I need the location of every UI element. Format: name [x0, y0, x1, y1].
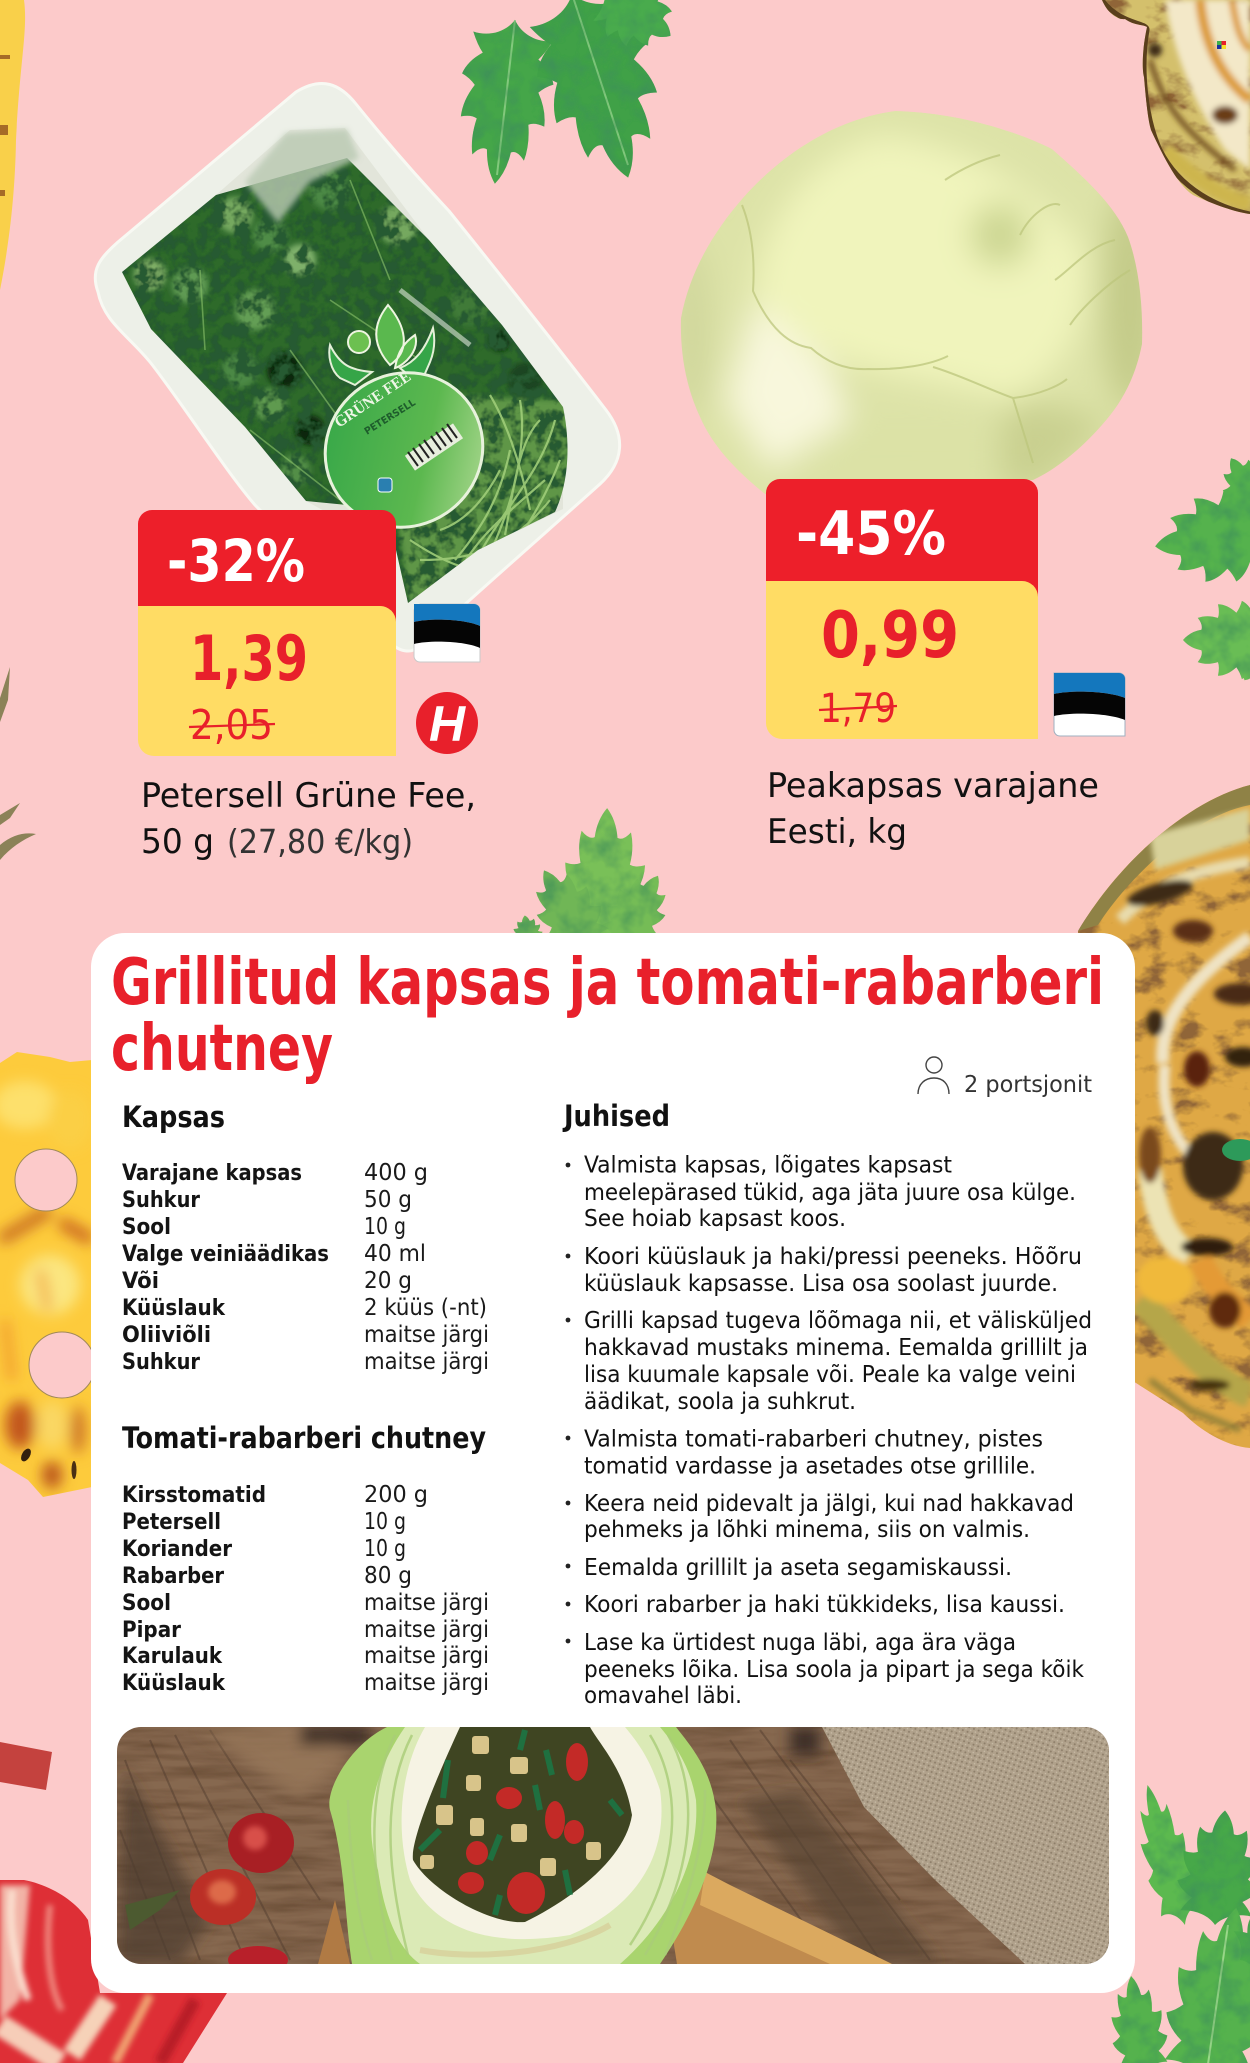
barcode bars: [408, 424, 457, 466]
ingredients: chutney: maitse järgi: [364, 1588, 489, 1616]
icon: person: [918, 1057, 949, 1094]
ingredients: chutney: Rabarber: [122, 1563, 224, 1589]
ingredients: Kapsas: maitse järgi: [364, 1320, 489, 1348]
ingredients: Kapsas: Suhkur: [122, 1187, 200, 1213]
ingredients: chutney: Pipar: [122, 1617, 181, 1643]
ingredients: Kapsas: 2 küüs (-nt): [364, 1293, 487, 1321]
colour registration mark: [1217, 41, 1226, 49]
ingredients: chutney: Küüslauk: [122, 1670, 226, 1696]
ingredients: Kapsas: 10 g: [364, 1212, 406, 1240]
flag: Estonia, parsley: [414, 604, 480, 662]
decoration: rhubarb lower left: [0, 1875, 240, 2063]
tag red: [138, 510, 396, 625]
burlap cloth: [822, 1727, 1109, 1964]
badge: H: [416, 692, 478, 754]
step texts: hakkavad mustaks minema. Eemalda grillilt ja: [584, 1333, 1088, 1361]
step texts: [584, 1150, 1092, 1709]
label logo: [378, 478, 392, 492]
ingredients: Kapsas: Suhkur: [122, 1349, 200, 1375]
product label: [295, 305, 513, 558]
decoration: pineapple sliver top left: [0, 0, 25, 290]
label crown: [329, 328, 434, 385]
ingredients: Kapsas: 400 g: [364, 1158, 428, 1186]
tray: [95, 83, 620, 651]
decoration: parsley leaf above the card: [510, 807, 683, 966]
decoration: parsley leaf bottom right: [1104, 1779, 1250, 2063]
step texts: lisa kuumale kapsale või. Peale ka valge veini: [584, 1360, 1076, 1388]
ingredients: chutney: 10 g: [364, 1534, 406, 1562]
bullets: [566, 1163, 570, 1643]
product name: cabbage: [767, 766, 1099, 852]
step texts: omavahel läbi.: [584, 1681, 742, 1709]
cabbage head: [676, 111, 1158, 495]
heading: Juhised: Juhised: [562, 1099, 670, 1133]
ingredients: chutney: maitse järgi: [364, 1615, 489, 1643]
parsley bunch: [110, 150, 580, 610]
product: cabbage: [676, 111, 1158, 495]
step texts: küüslauk kapsasse. Lisa osa soolast juurde.: [584, 1269, 1058, 1297]
product name: cabbage: Eesti, kg: [767, 812, 907, 852]
heading: Kapsas: Kapsas: [122, 1100, 225, 1134]
panel: recipe card: [91, 933, 1135, 1993]
ingredients: chutney: Kirsstomatid: [122, 1482, 266, 1508]
flag: Estonia, cabbage: [1054, 673, 1125, 736]
step texts: Koori rabarber ja haki tükkideks, lisa kaussi.: [584, 1590, 1065, 1618]
ingredients: Kapsas: Küüslauk: [122, 1295, 226, 1321]
price tag: cabbage: [766, 479, 1038, 739]
ingredients: Kapsas: Varajane kapsas: [122, 1160, 302, 1186]
step texts: tomatid vardasse ja asetades otse grillile.: [584, 1452, 1036, 1480]
ingredients: chutney: Sool: [122, 1590, 171, 1616]
discount: -45%: [796, 499, 946, 569]
ingredients: Kapsas: Valge veiniäädikas: [122, 1241, 329, 1267]
old price: 1,79: [820, 686, 896, 732]
heading: Tomati-rabarberi chutney: Tomati-rabarberi chutney: [122, 1421, 486, 1455]
product: parsley tray: [95, 83, 620, 651]
step texts: See hoiab kapsast koos.: [584, 1204, 846, 1232]
salsa: [413, 1727, 632, 1922]
ingredients: chutney: Koriander: [122, 1536, 232, 1562]
step texts: pehmeks ja lõhki minema, siis on valmis.: [584, 1515, 1030, 1543]
badge: H: H: [429, 696, 466, 752]
step texts: Lase ka ürtidest nuga läbi, aga ära väga: [584, 1628, 1016, 1656]
step texts: peeneks lõika. Lisa soola ja pipart ja sega kõik: [584, 1655, 1085, 1683]
decoration: grilled cabbage top right: [1100, 0, 1250, 220]
product name: parsley: Petersell Grüne Fee,: [141, 776, 476, 816]
wooden table: [117, 1727, 1109, 1964]
ingredients: chutney: 10 g: [364, 1507, 406, 1535]
ingredients: Kapsas: [122, 1158, 489, 1375]
cabbage wedge: [329, 1727, 716, 1964]
ingredients: chutney: 200 g: [364, 1480, 428, 1508]
product name: parsley: (27,80 €/kg): [227, 822, 413, 861]
product name: parsley: 50 g: [141, 822, 214, 862]
recipe title: chutney: [111, 1012, 333, 1086]
film glare: [400, 290, 470, 345]
step texts: Keera neid pidevalt ja jälgi, kui nad hakkavad: [584, 1489, 1074, 1517]
price: 0,99: [821, 599, 959, 673]
cherry tomatoes: [125, 1813, 294, 1974]
step texts: Koori küüslauk ja haki/pressi peeneks. Hõõru: [584, 1242, 1082, 1270]
tag red: [766, 479, 1038, 600]
wooden board: [318, 1872, 892, 1964]
recipe title: Grillitud kapsas ja tomati-rabarberi: [111, 946, 1104, 1020]
ingredients: Kapsas: Sool: [122, 1214, 171, 1240]
decoration: grilled cabbage right: [1070, 780, 1250, 1460]
label leaf: [376, 305, 416, 368]
barcode: [405, 423, 463, 471]
step texts: Valmista kapsas, lõigates kapsast: [584, 1150, 952, 1178]
ingredients: Kapsas: Või: [122, 1268, 159, 1294]
step texts: Valmista tomati-rabarberi chutney, pistes: [584, 1424, 1043, 1452]
ingredients: chutney: [122, 1480, 489, 1696]
tag yellow: [138, 606, 396, 756]
step texts: meelepärased tükid, aga jäta juure osa külge.: [584, 1178, 1076, 1206]
ingredients: chutney: Petersell: [122, 1509, 221, 1535]
product name: parsley: [141, 776, 476, 862]
price tag: parsley: [138, 510, 396, 756]
product name: cabbage: Peakapsas varajane: [767, 766, 1099, 806]
step texts: Grilli kapsad tugeva lõõmaga nii, et välisküljed: [584, 1306, 1092, 1334]
ingredients: chutney: 80 g: [364, 1561, 412, 1589]
decoration: parsley leaf top centre: [449, 0, 692, 194]
dark wood patches: [117, 1727, 940, 1964]
price: 1,39: [190, 622, 308, 695]
step texts: Eemalda grillilt ja aseta segamiskaussi.: [584, 1553, 1012, 1581]
decoration: stems left: [0, 667, 36, 860]
ingredients: chutney: Karulauk: [122, 1643, 223, 1669]
instructions: [566, 1150, 1092, 1709]
ingredients: Kapsas: maitse järgi: [364, 1347, 489, 1375]
portions: 2 portsjonit: [964, 1072, 1092, 1098]
ingredients: chutney: maitse järgi: [364, 1641, 489, 1669]
ingredients: Kapsas: 50 g: [364, 1185, 412, 1213]
wood grain: [120, 1730, 930, 1960]
ingredients: Kapsas: Oliiviõli: [122, 1322, 211, 1348]
ingredients: Kapsas: 20 g: [364, 1266, 412, 1294]
decoration: parsley leaves right: [1149, 446, 1250, 690]
tray inner wall: [122, 128, 563, 603]
ingredients: Kapsas: 40 ml: [364, 1239, 426, 1267]
step texts: äädikat, soola ja suhkrut.: [584, 1387, 856, 1415]
ingredients: chutney: maitse järgi: [364, 1668, 489, 1696]
label dot: [348, 331, 370, 353]
discount: -32%: [167, 527, 305, 595]
label body: [295, 342, 513, 558]
decoration: pineapple slices left: [0, 1050, 95, 1500]
recipe title: [111, 946, 1104, 1086]
tag yellow: [766, 581, 1038, 739]
decoration: rhubarb piece: [0, 1742, 52, 1790]
old price: 2,05: [190, 701, 273, 749]
recipe photo: [117, 1727, 1109, 1974]
label name: PETERSELL: [363, 397, 418, 438]
label brand: GRÜNE FEE: [331, 367, 414, 431]
plastic film: [245, 129, 359, 223]
